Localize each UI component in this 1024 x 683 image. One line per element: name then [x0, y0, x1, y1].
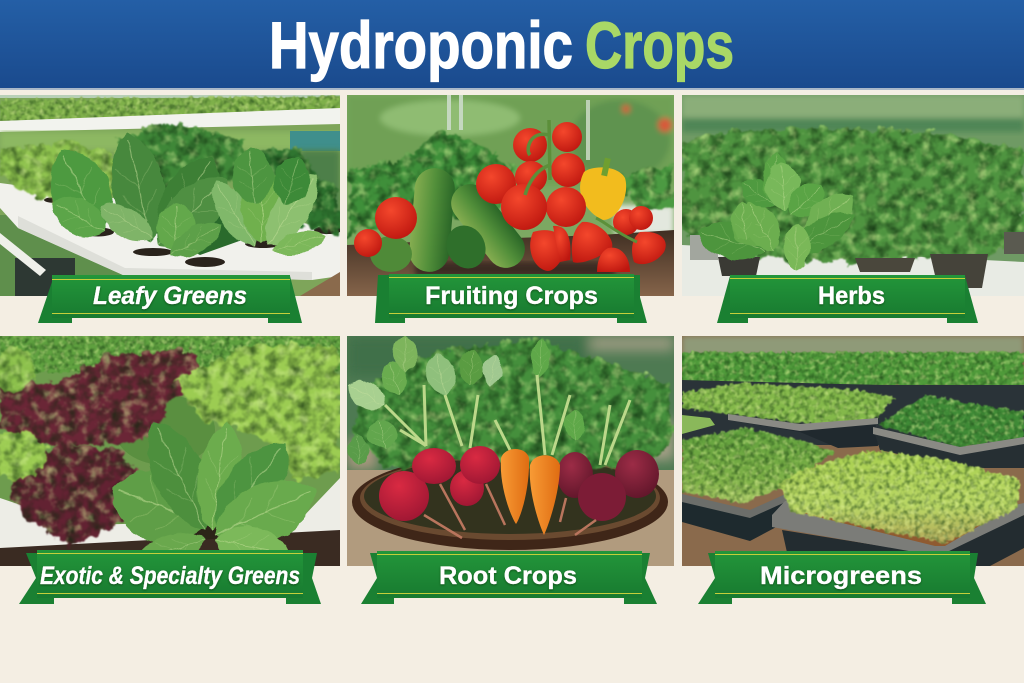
- red lettuce: [0, 350, 205, 545]
- root leaves: [342, 336, 674, 470]
- middle tray: [682, 428, 835, 541]
- panel: microgreens photo: [682, 336, 1024, 566]
- panel: herbs photo: [682, 95, 1024, 296]
- back row: [682, 352, 1024, 445]
- cucumbers: [370, 166, 533, 276]
- front tray: [772, 450, 1024, 566]
- bowl: [352, 454, 668, 550]
- herb pots: [690, 232, 1024, 288]
- banner: Herbs: Herbs: [818, 282, 885, 310]
- title band: [0, 0, 1024, 90]
- yellow pepper: [580, 167, 626, 220]
- panel: leafy greens photo: [0, 95, 342, 296]
- panel: exotic and specialty greens photo: [0, 336, 340, 573]
- wood floor: [682, 468, 1024, 566]
- right tray: [873, 395, 1024, 468]
- panel: fruiting crops photo: [347, 95, 674, 296]
- romaine plant: [112, 422, 316, 550]
- banner: Exotic & Specialty Greens: [19, 550, 321, 604]
- banner: Exotic & Specialty Greens: Exotic & Specialty Greens: [40, 562, 300, 590]
- herb bushes: [682, 128, 1024, 262]
- tomatoes: [354, 120, 626, 257]
- lime green lettuce: [0, 345, 340, 480]
- banner: Microgreens: Microgreens: [760, 562, 922, 590]
- lime lettuce: [0, 140, 130, 205]
- bottom left supports: [0, 215, 130, 296]
- banner: Fruiting Crops: Fruiting Crops: [425, 282, 598, 310]
- hydroponic tray: [0, 183, 342, 296]
- title text: Hydroponic: [269, 8, 573, 82]
- banner: Leafy Greens: [38, 275, 302, 323]
- left small tray: [682, 415, 715, 434]
- banner: Microgreens: [698, 551, 986, 604]
- romaine plants: [36, 122, 340, 266]
- title text: Crops: [585, 8, 734, 82]
- basil plant: [698, 152, 854, 270]
- banner: Leafy Greens: Leafy Greens: [93, 282, 247, 310]
- foliage: [350, 130, 674, 235]
- radishes and carrots: [379, 446, 659, 538]
- banner: Root Crops: [361, 551, 657, 604]
- strawberries: [530, 206, 666, 272]
- panel: root crops photo: [342, 336, 674, 566]
- second row tray: [682, 383, 895, 448]
- banner: Herbs: [717, 275, 978, 323]
- banner: Fruiting Crops: [375, 274, 647, 323]
- banner: Root Crops: Root Crops: [439, 562, 577, 590]
